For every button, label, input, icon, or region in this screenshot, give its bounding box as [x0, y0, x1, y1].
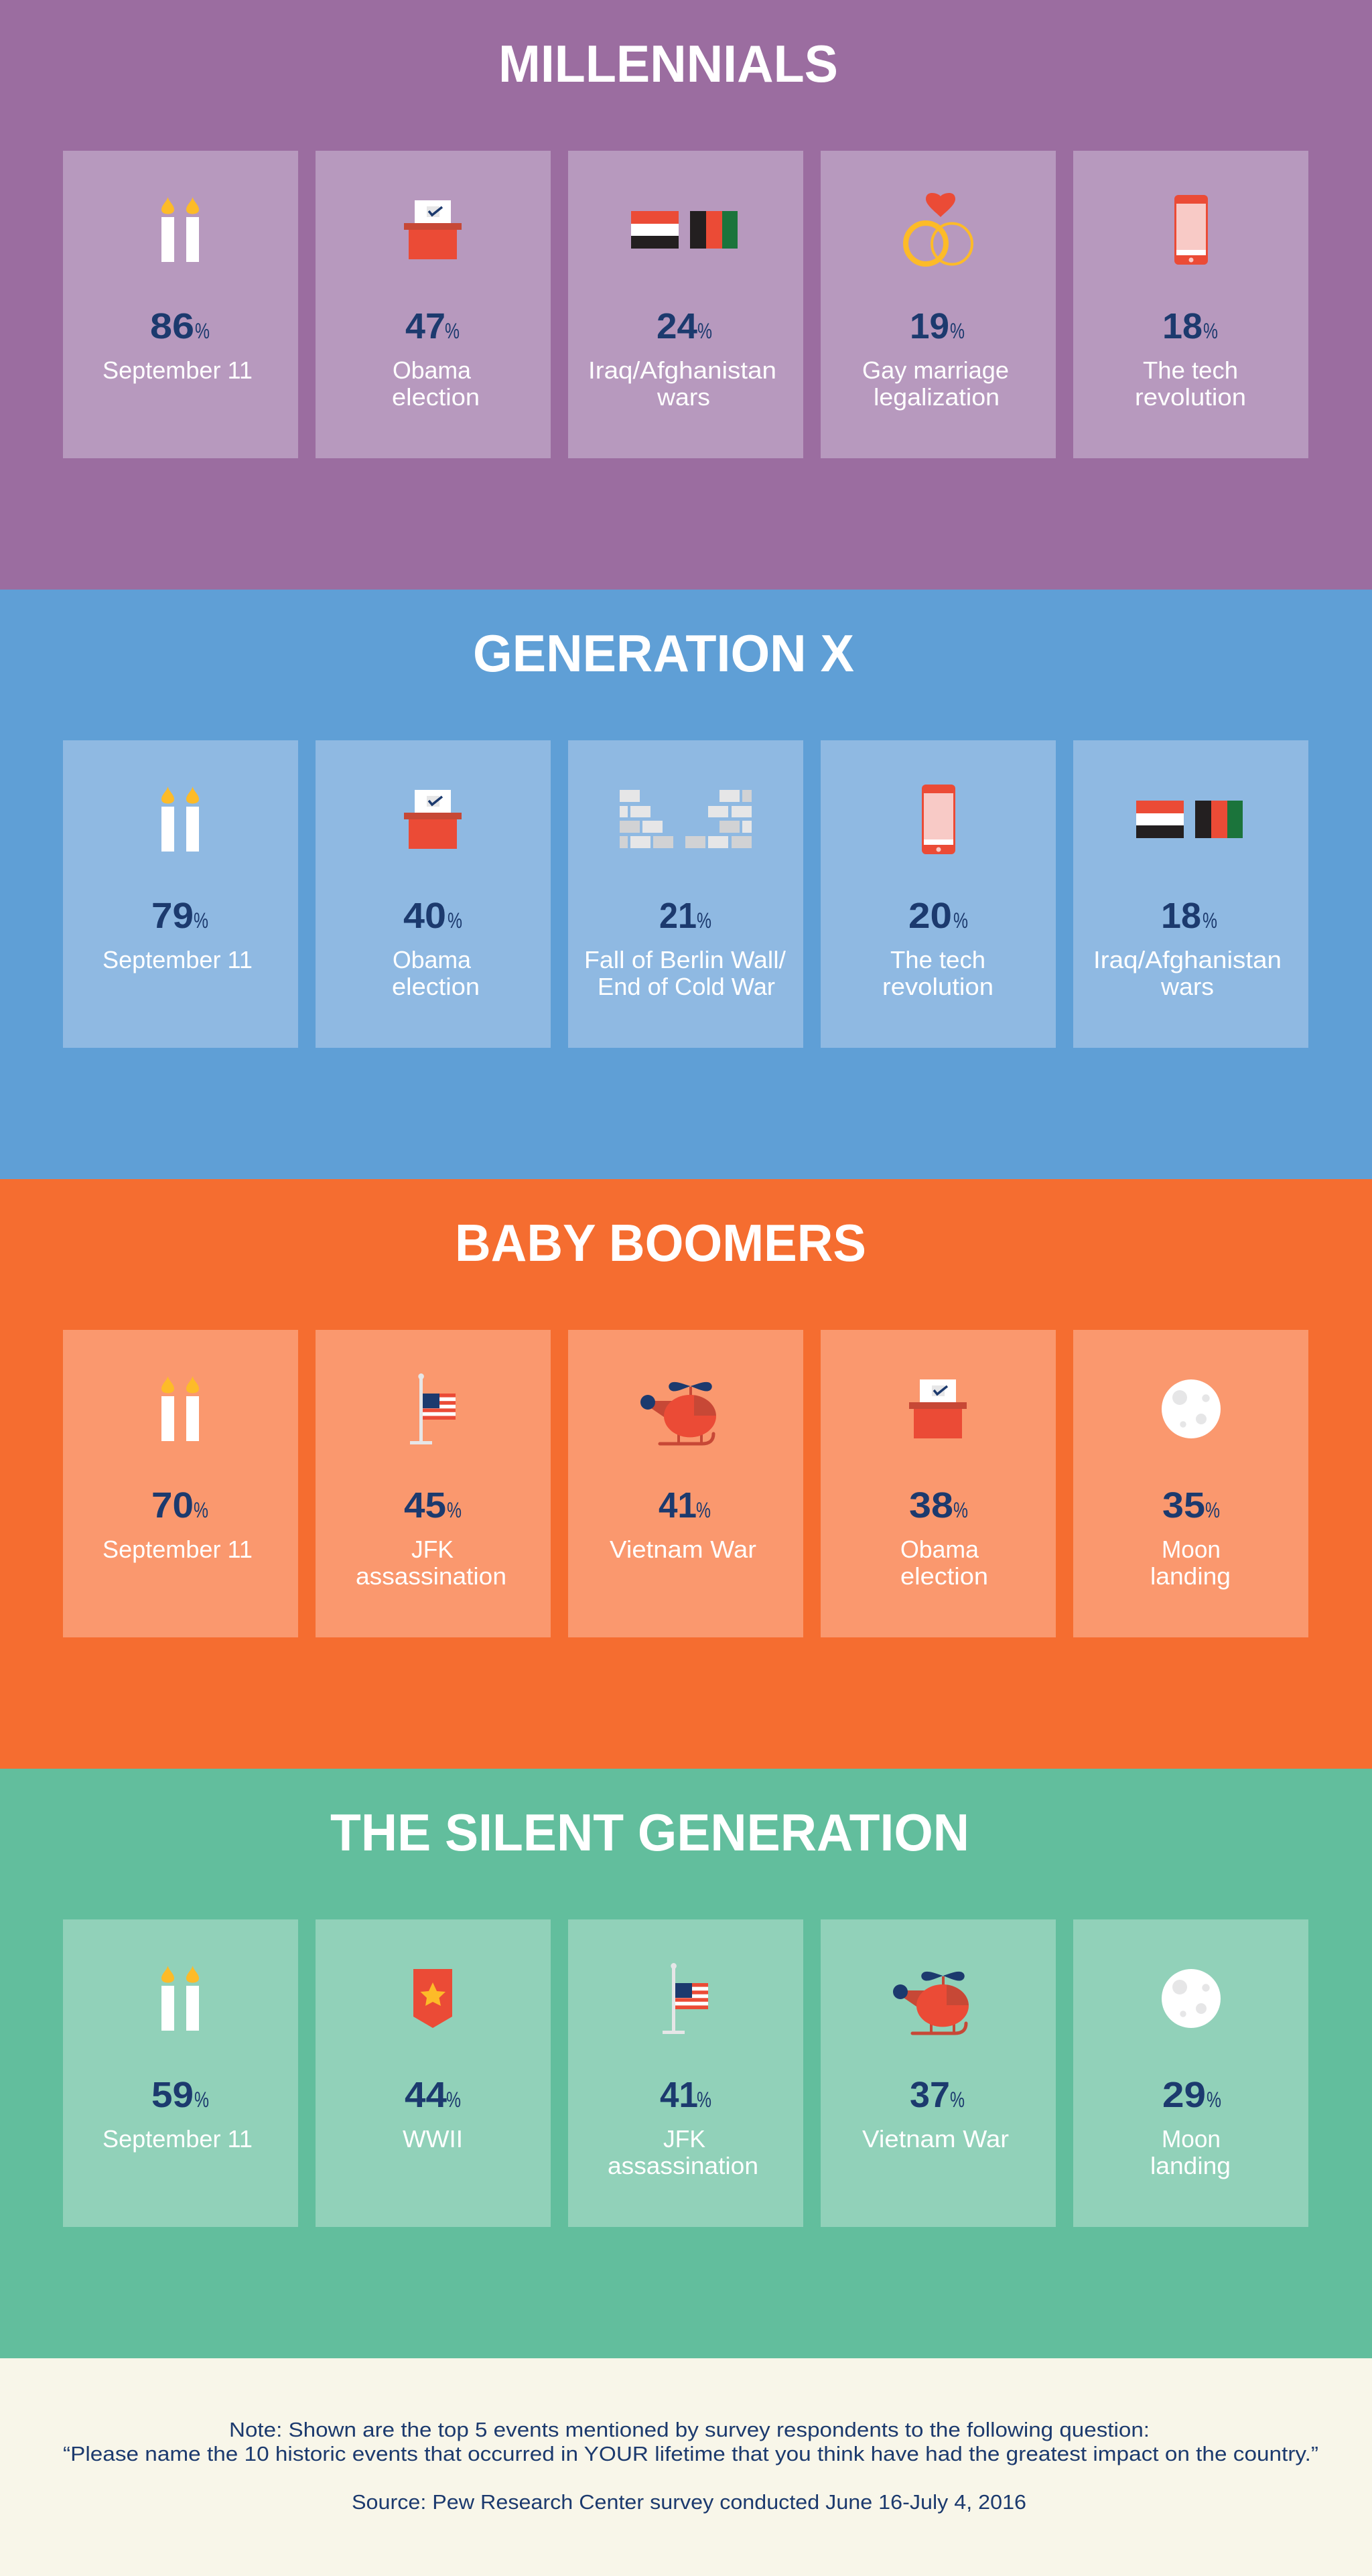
label: Iraq/Afghanistan [1093, 946, 1282, 973]
label: Moon [1162, 2125, 1221, 2153]
icon: flag at half-mast [410, 1373, 456, 1444]
label [1150, 1536, 1231, 1590]
card: Moon landing [1073, 1330, 1308, 1637]
panel: footer note and source [0, 2358, 1372, 2576]
percentage 38 [909, 1485, 968, 1526]
percentage 20: 20 [908, 896, 952, 936]
card: JFK assassination [568, 1919, 803, 2227]
percentage 24: 24 [657, 306, 697, 346]
label: September 11 [102, 1536, 253, 1563]
label: landing [1150, 2152, 1231, 2179]
label [392, 946, 480, 1000]
label: September 11 [102, 2125, 253, 2153]
label: Moon [1162, 1536, 1221, 1563]
icon: broken brick wall [620, 790, 752, 848]
percentage 45 [404, 1485, 462, 1526]
percentage 40 [403, 896, 462, 936]
label: legalization [874, 383, 1000, 411]
card: Obama election [316, 151, 551, 458]
percentage 70: % [194, 1498, 208, 1522]
heading: Baby Boomers: BABY BOOMERS [455, 1213, 866, 1272]
card: Gay marriage legalization [821, 151, 1056, 458]
label: The tech [1143, 356, 1238, 384]
icon: flags [1136, 801, 1243, 838]
note line 2: “Please name the 10 historic events that occurred in YOUR lifetime that you think have had the greatest impact on the country.” [63, 2442, 1318, 2465]
icon: moon [1162, 1379, 1221, 1438]
label: revolution [1135, 383, 1246, 411]
icon: ballot box [404, 790, 462, 849]
percentage 40: % [448, 908, 462, 933]
percentage 38: % [953, 1498, 968, 1522]
percentage 29: 29 [1162, 2075, 1206, 2115]
icon: smartphone [922, 785, 955, 854]
card: September 11 [63, 151, 298, 458]
percentage 44: % [446, 2088, 461, 2112]
percentage 47: % [445, 319, 460, 343]
label [392, 356, 480, 411]
label [882, 946, 993, 1000]
heading: Generation X: GENERATION X [473, 624, 854, 683]
label: election [392, 973, 480, 1000]
percentage 24: % [697, 319, 712, 343]
label [584, 946, 786, 1000]
percentage 44: 44 [405, 2075, 447, 2115]
panel: Generation X [0, 590, 1372, 1179]
label: wars [1160, 973, 1214, 1000]
card: JFK assassination [316, 1330, 551, 1637]
icon: helicopter [893, 1972, 969, 2033]
icon: moon [1162, 1969, 1221, 2028]
card: The tech revolution [1073, 151, 1308, 458]
card: Iraq/Afghanistan wars [568, 151, 803, 458]
percentage 40: 40 [403, 896, 446, 936]
percentage 35: % [1205, 1498, 1220, 1522]
percentage 86 [150, 306, 210, 346]
percentage 21: % [697, 908, 711, 933]
label: assassination [608, 2152, 758, 2179]
percentage 41: 41 [659, 1485, 697, 1526]
icon: helicopter [640, 1382, 716, 1444]
label: Gay marriage [862, 356, 1009, 384]
percentage 47: 47 [405, 306, 445, 346]
label: WWII [403, 2125, 463, 2153]
label [588, 356, 776, 411]
percentage 45: 45 [404, 1485, 446, 1526]
percentage 38: 38 [909, 1485, 953, 1526]
percentage 29 [1162, 2075, 1221, 2115]
percentage 86: % [195, 319, 210, 343]
percentage 20 [908, 896, 968, 936]
label [356, 1536, 506, 1590]
panel: Baby Boomers [0, 1179, 1372, 1769]
label: JFK [411, 1536, 454, 1563]
label: wars [657, 383, 710, 411]
label: Vietnam War [862, 2125, 1009, 2153]
source: Source: Pew Research Center survey conducted June 16-July 4, 2016 [352, 2490, 1026, 2514]
icon: smartphone [1174, 195, 1208, 265]
label [1150, 2125, 1231, 2179]
percentage 79: % [194, 908, 208, 933]
label: Obama [393, 946, 472, 973]
percentage 37: % [950, 2088, 965, 2112]
icon: flag at half-mast [663, 1963, 708, 2034]
label: Obama [900, 1536, 979, 1563]
label: revolution [882, 973, 993, 1000]
card: September 11 [63, 740, 298, 1048]
percentage 79: 79 [151, 896, 194, 936]
heading: Millennials: MILLENNIALS [498, 34, 838, 93]
card: Obama election [316, 740, 551, 1048]
label: JFK [663, 2125, 705, 2153]
label [1093, 946, 1282, 1000]
label: election [392, 383, 480, 411]
icon: candles [161, 787, 199, 852]
percentage 37: 37 [910, 2075, 950, 2115]
card: Fall of Berlin Wall [568, 740, 803, 1048]
percentage 20: % [953, 908, 968, 933]
icon: ballot box [909, 1379, 967, 1438]
percentage 18: 18 [1162, 306, 1203, 346]
card: September 11 [63, 1919, 298, 2227]
label [1135, 356, 1246, 411]
percentage 29: % [1207, 2088, 1221, 2112]
percentage 19: % [950, 319, 965, 343]
icon: candles [161, 1376, 199, 1441]
label: landing [1150, 1562, 1231, 1590]
percentage 18: % [1203, 319, 1218, 343]
card: Moon landing [1073, 1919, 1308, 2227]
label: The tech [890, 946, 985, 973]
label [862, 356, 1009, 411]
label: election [900, 1562, 988, 1590]
icon: ribbon with star [413, 1969, 452, 2028]
icon: ballot box [404, 200, 462, 259]
percentage 59 [151, 2075, 209, 2115]
card: Vietnam War [568, 1330, 803, 1637]
percentage 86: 86 [150, 306, 194, 346]
percentage 59: 59 [151, 2075, 194, 2115]
panel: Millennials [0, 0, 1372, 590]
label: Iraq/Afghanistan [588, 356, 776, 384]
heading: The Silent Generation: THE SILENT GENERATION [330, 1803, 969, 1862]
label: Vietnam War [610, 1536, 756, 1563]
percentage 41: % [696, 1498, 711, 1522]
card: September 11 [63, 1330, 298, 1637]
icon: wedding rings and heart [906, 193, 972, 264]
label [608, 2125, 758, 2179]
label [900, 1536, 988, 1590]
label: September 11 [102, 946, 253, 973]
note line 1: Note: Shown are the top 5 events mentioned by survey respondents to the following question: [229, 2418, 1150, 2441]
percentage 45: % [447, 1498, 462, 1522]
panel: The Silent Generation [0, 1769, 1372, 2358]
card: Obama election [821, 1330, 1056, 1637]
label: Fall of Berlin Wall/ [584, 946, 786, 973]
card: The tech revolution [821, 740, 1056, 1048]
card: Iraq/Afghanistan wars [1073, 740, 1308, 1048]
percentage 41: 41 [660, 2075, 698, 2115]
icon: candles [161, 197, 199, 262]
percentage 35: 35 [1162, 1485, 1205, 1526]
label: End of Cold War [598, 973, 775, 1000]
card: Vietnam War [821, 1919, 1056, 2227]
percentage 35 [1162, 1485, 1220, 1526]
percentage 19: 19 [910, 306, 949, 346]
percentage 21: 21 [659, 896, 697, 936]
percentage 41: % [697, 2088, 711, 2112]
icon: flags [631, 211, 738, 249]
percentage 18: 18 [1161, 896, 1201, 936]
label: September 11 [102, 356, 253, 384]
percentage 70: 70 [151, 1485, 194, 1526]
label: assassination [356, 1562, 506, 1590]
percentage 18: % [1203, 908, 1217, 933]
icon: candles [161, 1966, 199, 2031]
card: WWII [316, 1919, 551, 2227]
label: Obama [393, 356, 472, 384]
percentage 59: % [194, 2088, 209, 2112]
